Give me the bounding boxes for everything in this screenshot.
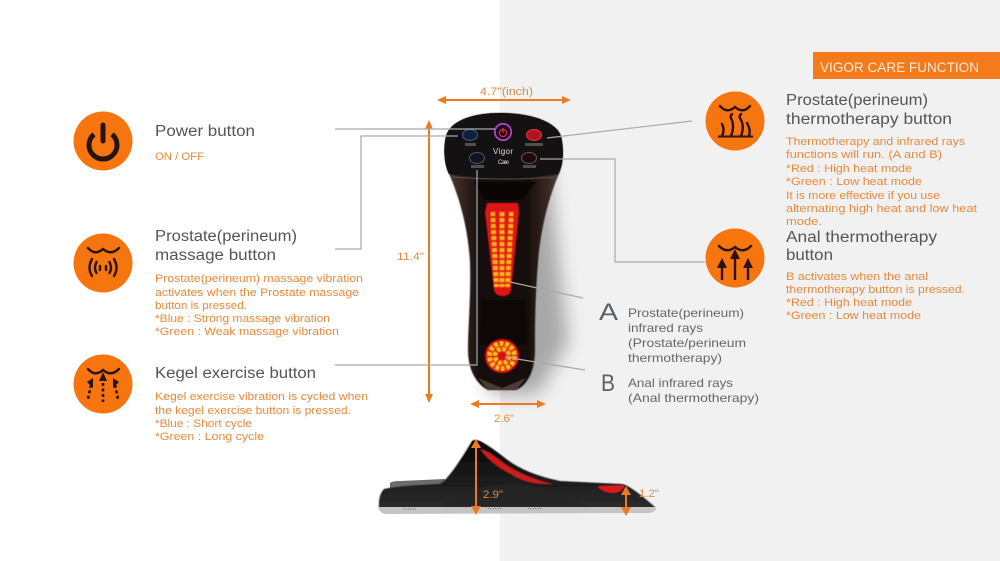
text: power button: ON / OFF <box>155 151 204 163</box>
text: power button: Power button <box>155 123 255 140</box>
text: prostate massage button: button is pressed. <box>155 300 247 312</box>
text: anal thermotherapy button: *Red : High heat mode <box>786 297 912 309</box>
text: anal thermotherapy button: button <box>786 247 833 264</box>
panel button: prostate massage <box>462 130 478 146</box>
text: prostate massage button: Prostate(perineum) massage vibration <box>155 273 363 285</box>
device logo: Care <box>498 160 510 166</box>
text: prostate thermotherapy button: *Red : High heat mode <box>786 163 912 175</box>
dimension: 2.6 inch width: 2.6" <box>494 413 514 425</box>
text: kegel exercise button: Kegel exercise vibration is cycled when <box>155 391 368 403</box>
dimension: 2.9 inch height: 2.9" <box>483 489 503 501</box>
product: massager top view <box>444 113 568 394</box>
device logo <box>493 147 513 166</box>
icon: prostate thermotherapy <box>706 92 764 150</box>
product: massager side view <box>379 440 656 514</box>
header tag: vigor care function <box>813 52 1000 79</box>
panel button: anal thermotherapy <box>522 152 536 168</box>
text: prostate thermotherapy button: Prostate(perineum) <box>786 92 928 109</box>
callout B: anal infrared rays: B <box>601 370 615 397</box>
text: kegel exercise button: Kegel exercise button <box>155 365 316 382</box>
text: prostate massage button: Prostate(perineum) <box>155 228 297 245</box>
text: prostate thermotherapy button: *Green : Low heat mode <box>786 176 922 188</box>
text: prostate thermotherapy button: mode. <box>786 216 822 228</box>
icon: kegel exercise <box>74 354 132 414</box>
dimension: 1.2 inch height: 1.2" <box>639 488 659 500</box>
callout B: anal infrared rays <box>601 370 759 405</box>
icon: power button <box>74 112 132 170</box>
text: prostate thermotherapy button: functions will run. (A and B) <box>786 149 942 161</box>
text: prostate massage button: massage button <box>155 247 276 264</box>
dimension: 4.7 inch width <box>437 86 571 104</box>
text: anal thermotherapy button: B activates when the anal <box>786 271 928 283</box>
panel button: prostate thermotherapy <box>525 130 543 146</box>
dimension: 2.9 inch height <box>471 439 503 515</box>
callout A: prostate infrared rays: thermotherapy) <box>628 351 722 365</box>
text: kegel exercise button <box>155 365 368 443</box>
text: prostate thermotherapy button: alternating high heat and low heat <box>786 203 977 215</box>
text: anal thermotherapy button: thermotherapy button is pressed. <box>786 284 965 296</box>
callout A: prostate infrared rays <box>599 299 746 365</box>
text: kegel exercise button: *Green : Long cycle <box>155 431 264 443</box>
led strip A <box>485 203 519 296</box>
text: prostate thermotherapy button: thermotherapy button <box>786 111 952 128</box>
callout B: anal infrared rays: (Anal thermotherapy) <box>628 391 759 405</box>
text: anal thermotherapy button: *Green : Low heat mode <box>786 310 921 322</box>
text: prostate massage button <box>155 228 363 338</box>
text: kegel exercise button: the kegel exercise button is pressed. <box>155 405 351 417</box>
callout A: prostate infrared rays: infrared rays <box>628 321 703 335</box>
text: anal thermotherapy button <box>786 229 965 322</box>
dimension: 11.4 inch height <box>397 120 433 403</box>
text: prostate massage button: *Blue : Strong massage vibration <box>155 313 330 325</box>
panel button: power <box>495 124 511 140</box>
header tag: vigor care function: VIGOR CARE FUNCTION <box>820 59 979 75</box>
icon: anal thermotherapy <box>706 228 764 288</box>
device logo: Vigor <box>493 147 513 156</box>
text: prostate massage button: activates when the Prostate massage <box>155 287 359 299</box>
text: prostate thermotherapy button: It is more effective if you use <box>786 190 940 202</box>
text: kegel exercise button: *Blue : Short cycle <box>155 418 252 430</box>
callout A: prostate infrared rays: (Prostate/perineum <box>628 336 746 350</box>
callout A: prostate infrared rays: Prostate(perineum) <box>628 306 744 320</box>
callout B: anal infrared rays: Anal infrared rays <box>628 376 733 390</box>
led circle B <box>485 339 519 373</box>
leader lines <box>335 121 705 370</box>
dimension: 4.7 inch width: 4.7"(inch) <box>480 86 533 98</box>
text: anal thermotherapy button: Anal thermotherapy <box>786 229 937 246</box>
callout A: prostate infrared rays: A <box>599 299 618 326</box>
text: prostate thermotherapy button: Thermotherapy and infrared rays <box>786 136 966 148</box>
dimension: 2.6 inch width <box>470 400 546 425</box>
dimension: 1.2 inch height <box>621 486 659 516</box>
dimension: 11.4 inch height: 11.4" <box>397 251 424 263</box>
text: prostate massage button: *Green : Weak massage vibration <box>155 326 339 338</box>
panel button: kegel <box>470 152 484 168</box>
text: power button <box>155 123 255 163</box>
text: prostate thermotherapy button <box>786 92 977 228</box>
icon: prostate massage <box>74 234 132 292</box>
